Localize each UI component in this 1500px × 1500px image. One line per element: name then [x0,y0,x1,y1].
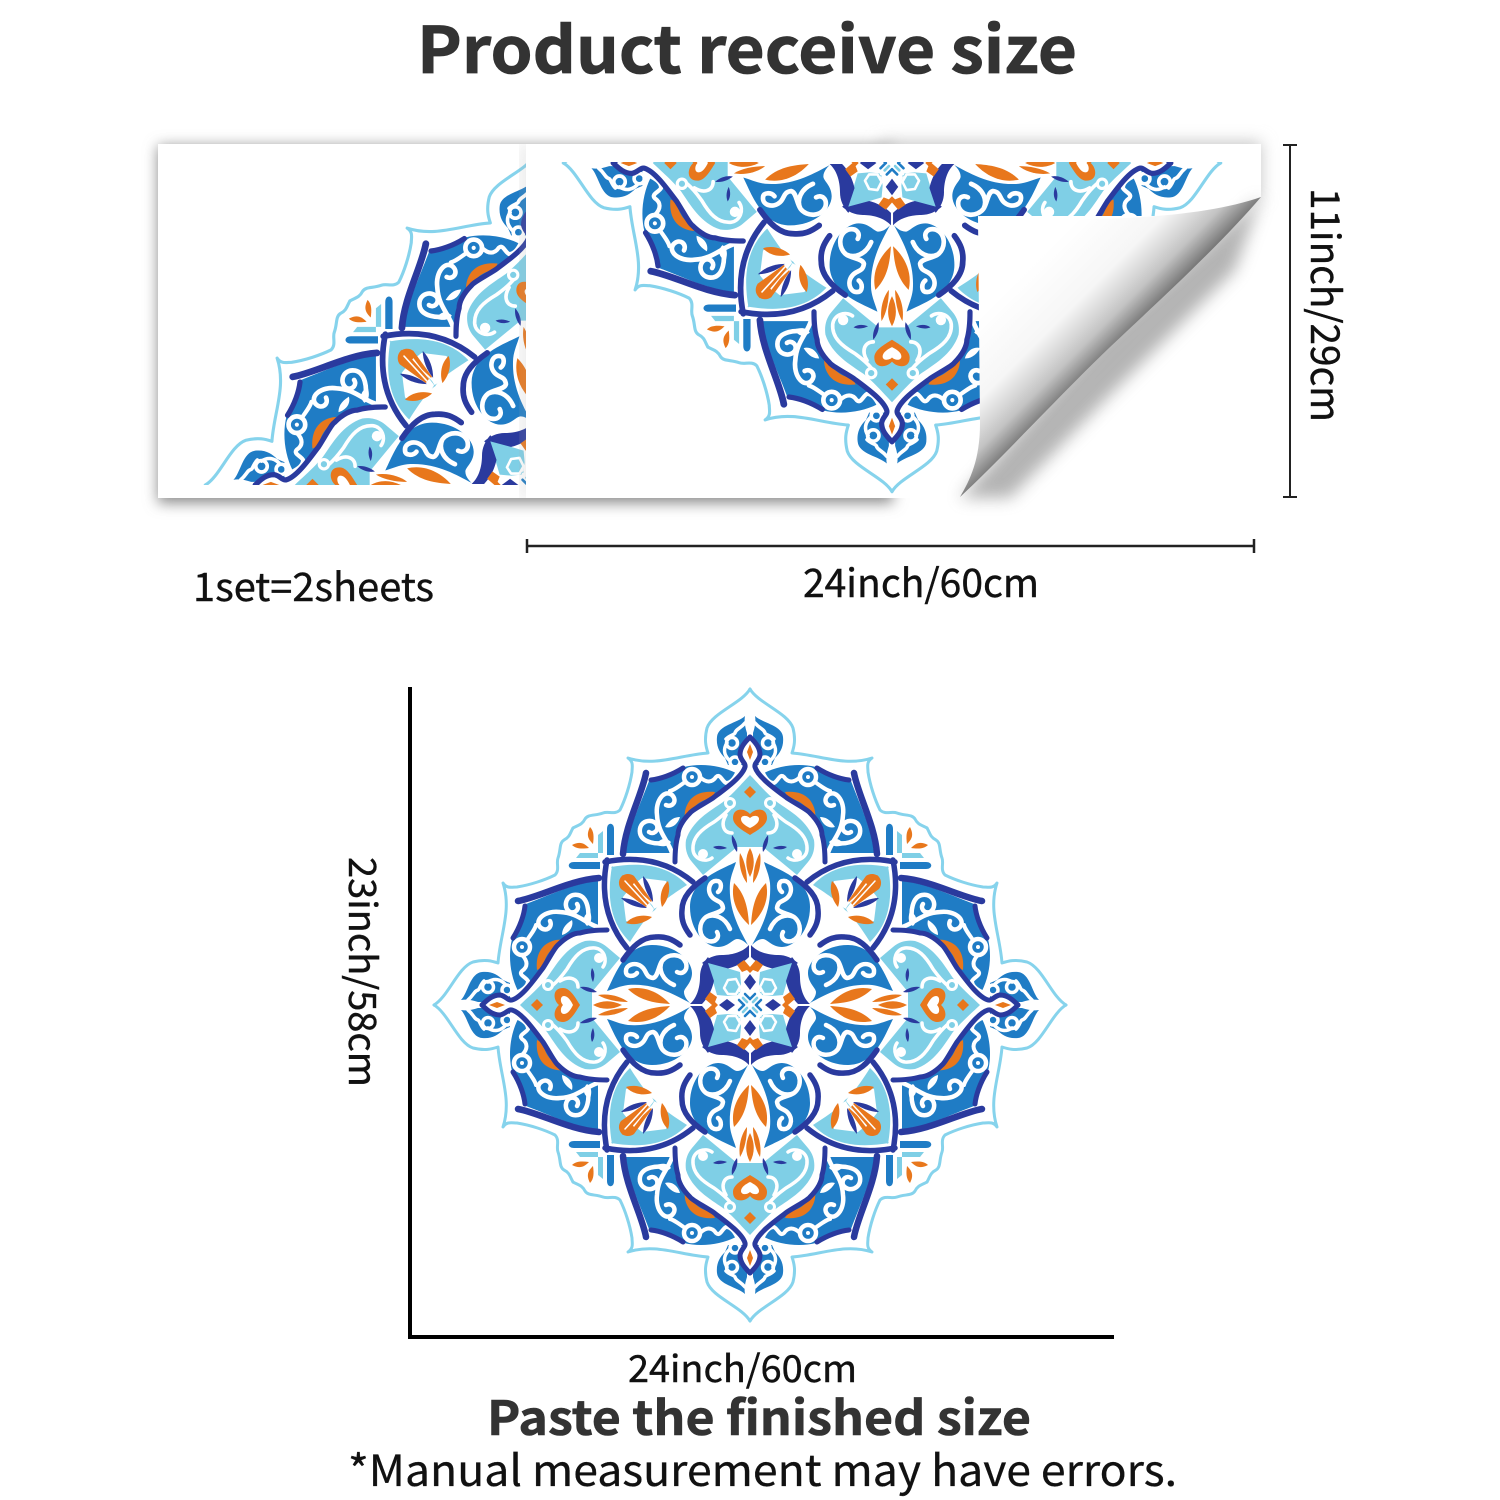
panel: left sheet [158,144,526,498]
finished mandala [434,689,1066,1321]
dimension: finished height: 23inch/58cm [338,857,393,1087]
title: Product receive size [417,0,1077,92]
dimension: sheet height [1283,145,1357,497]
heading: finished size: Paste the finished size [487,1380,1031,1449]
panel: right sheet [526,144,1261,498]
dimension: sheet width: 24inch/60cm [803,553,1039,609]
icon: peeled corner [960,197,1261,498]
note: *Manual measurement may have errors. [348,1437,1177,1499]
dimension: sheet height: 11inch/29cm [1299,188,1357,422]
dimension: finished width: 24inch/60cm [628,1339,857,1393]
axes [410,687,1114,1337]
label: set count: 1set=2sheets [193,557,434,613]
product sheets [148,132,1270,513]
dimension: sheet width [527,539,1254,609]
